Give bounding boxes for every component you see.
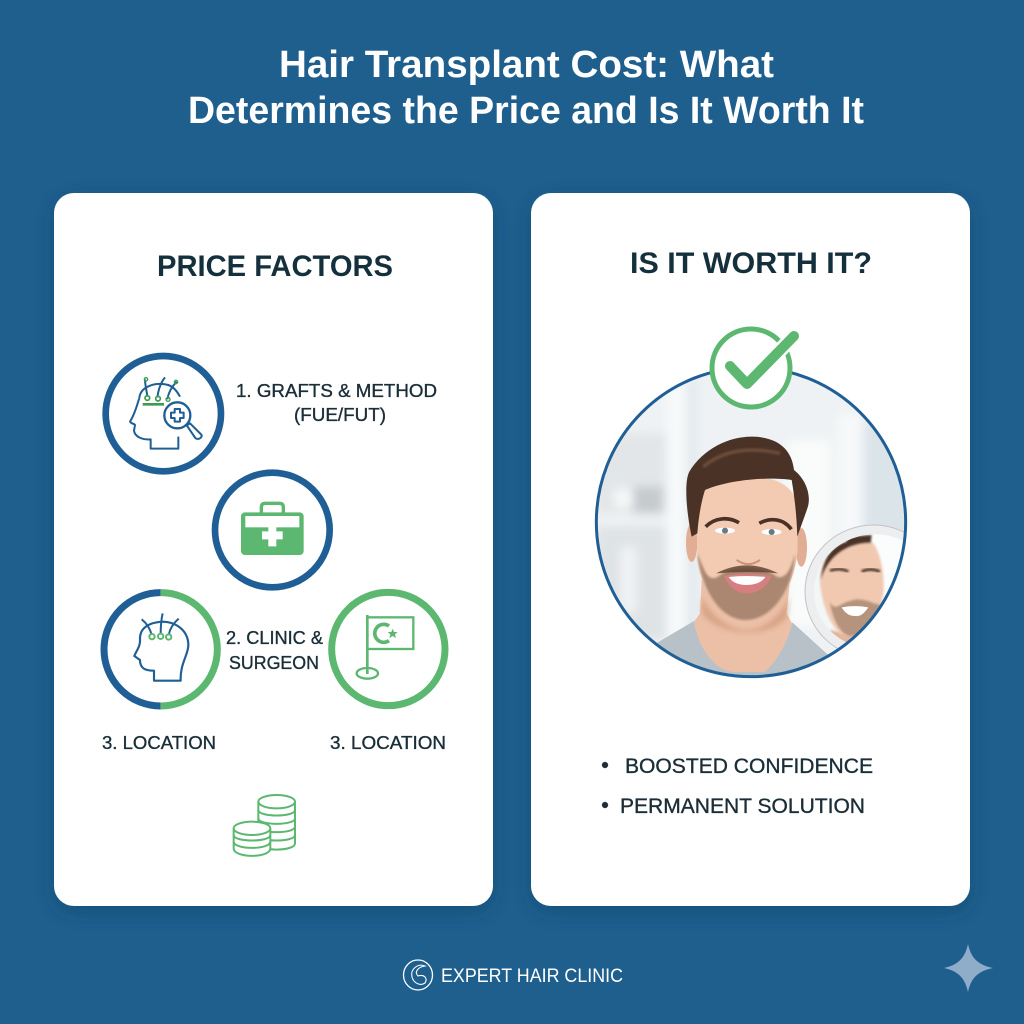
icon: clinic logo <box>404 960 432 990</box>
text: grafts and method: (FUE/FUT) <box>294 404 386 425</box>
beard <box>697 553 795 620</box>
icon: check badge <box>712 329 794 407</box>
ears <box>686 523 697 562</box>
neck shadow <box>702 597 789 632</box>
icon: sparkle <box>944 944 993 992</box>
heading: price factors: PRICE FACTORS <box>157 250 393 283</box>
title <box>188 44 864 132</box>
text: clinic and surgeon: 2. CLINIC & <box>226 627 324 648</box>
face <box>697 477 798 620</box>
nose <box>737 560 760 564</box>
footer logo <box>404 960 623 990</box>
benefit: permanent solution: PERMANENT SOLUTION <box>620 795 865 818</box>
photo: smiling man with mirror <box>594 372 908 678</box>
title: Hair Transplant Cost: What <box>279 44 774 86</box>
icon: head with magnifier <box>106 356 221 471</box>
icon: flag <box>332 592 445 706</box>
mirror <box>804 524 904 648</box>
text: clinic name: EXPERT HAIR CLINIC <box>441 966 623 987</box>
hair <box>686 437 809 537</box>
shirt <box>657 621 828 676</box>
mouth <box>724 574 772 593</box>
neck <box>694 580 792 672</box>
panel: price factors <box>54 193 493 906</box>
text: clinic and surgeon <box>226 627 324 673</box>
eyes <box>715 528 735 534</box>
benefit: boosted confidence: BOOSTED CONFIDENCE <box>625 755 873 778</box>
text: clinic and surgeon: SURGEON <box>229 652 319 673</box>
icon: medical case <box>215 473 330 587</box>
label: location right: 3. LOCATION <box>330 732 446 753</box>
panel: is it worth it <box>531 193 970 906</box>
label: location left: 3. LOCATION <box>102 732 216 753</box>
icon: coins <box>234 795 295 856</box>
icon: head with follicles <box>104 593 217 706</box>
title: Determines the Price and Is It Worth It <box>188 90 864 132</box>
heading: is it worth it: IS IT WORTH IT? <box>630 247 872 280</box>
text: grafts and method: 1. GRAFTS & METHOD <box>236 380 437 401</box>
moustache <box>716 565 778 573</box>
brows <box>706 519 739 527</box>
text: grafts and method <box>236 380 437 425</box>
